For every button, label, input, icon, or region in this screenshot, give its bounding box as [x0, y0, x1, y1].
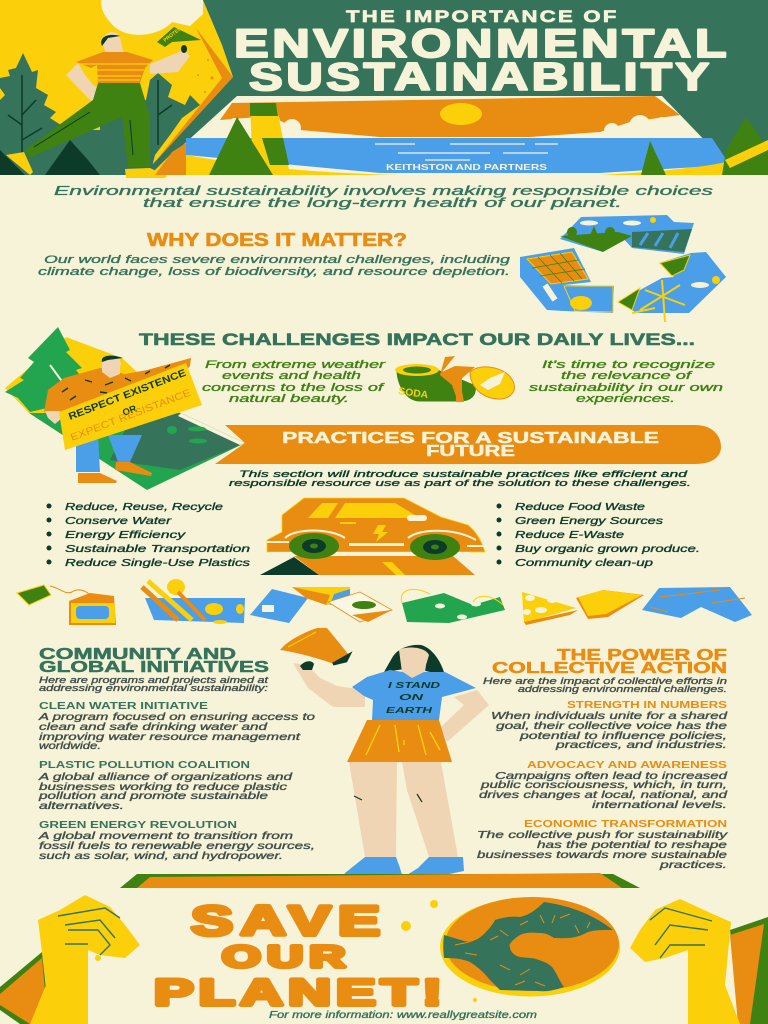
sign text: OR: [121, 403, 139, 419]
text block: daily impact right: It's time to recognize: [542, 359, 715, 371]
intro: addressing environmental challenges.: [518, 684, 727, 694]
heading: save our planet: [154, 898, 442, 1013]
intro text: that ensure the long-term health of our planet.: [143, 195, 622, 210]
item: strength in numbers: When individuals unite for a shared: [491, 711, 728, 722]
intro text: Environmental sustainability involves making responsible choices: [54, 183, 714, 198]
text block: daily impact left: events and health: [222, 370, 361, 382]
item: strength in numbers: potential to influence policies,: [518, 731, 727, 742]
list: practices left: [46, 501, 251, 569]
panel: power of collective action: [477, 647, 729, 871]
item: clean water: improving water resource management: [39, 732, 302, 743]
text block: daily impact right: experiences.: [576, 393, 675, 405]
item: plastic pollution: pollution and promote sustainable: [37, 791, 269, 802]
icon: cutlery and lunch box: [142, 579, 245, 624]
item: clean water: [38, 700, 316, 752]
item: plastic pollution: alternatives.: [39, 801, 124, 812]
title: THE IMPORTANCE OF: [346, 7, 616, 26]
text block: [38, 254, 511, 278]
icon row: eco products: [17, 579, 752, 625]
item: clean water: CLEAN WATER INITIATIVE: [39, 700, 208, 712]
illustration: protester with sign: [5, 327, 245, 490]
text block: daily impact right: the relevance of: [561, 370, 693, 382]
icon: food packaging: [250, 587, 392, 623]
panel: community and global initiatives: [37, 646, 316, 862]
item: green energy: GREEN ENERGY REVOLUTION: [39, 819, 237, 831]
heading: [492, 647, 727, 677]
icon: left hand: [30, 895, 140, 1024]
list: practices left: Reduce, Reuse, Recycle: [65, 501, 223, 513]
item: plastic pollution: A global alliance of organizations and: [37, 772, 293, 783]
list: practices right: Reduce E-Waste: [515, 529, 624, 541]
banner: practices heading: PRACTICES FOR A SUSTAINABLE: [282, 430, 659, 447]
text block: daily impact right: sustainability in our own: [529, 382, 723, 394]
heading: WHY DOES IT MATTER?: [147, 230, 407, 250]
heading: [39, 646, 269, 676]
icon: soda can and eggshell: [395, 356, 514, 402]
item: green energy: A global movement to transition from: [37, 831, 293, 842]
text block: daily impact left: From extreme weather: [205, 359, 387, 371]
intro: Here are programs and projects aimed at: [39, 675, 269, 685]
item: economic transformation: businesses towards more sustainable: [477, 850, 728, 861]
illustration: man with megaphone: PROTECT: [163, 24, 185, 44]
heading: THE POWER OF: [557, 647, 727, 664]
item: strength in numbers: STRENGTH IN NUMBERS: [567, 699, 727, 711]
item: clean water: A program focused on ensuring access to: [38, 712, 316, 723]
list: practices left: Sustainable Transportation: [65, 543, 250, 555]
item: economic transformation: [477, 818, 729, 871]
panel: header banner: [0, 0, 768, 178]
icon: right hand: [630, 899, 740, 1024]
text block: climate change, loss of biodiversity, and resource depletion.: [38, 266, 510, 278]
sign text: [67, 368, 193, 444]
icon: speech bubble: [101, 0, 203, 35]
list: practices right: Reduce Food Waste: [515, 501, 645, 513]
text block: practices intro: This section will introduce sustainable practices like efficient and: [239, 469, 688, 480]
text block: daily impact left: concerns to the loss of: [202, 382, 385, 394]
item: green energy: such as solar, wind, and hydropower.: [39, 851, 283, 862]
text block: daily impact left: natural beauty.: [229, 393, 349, 405]
banner: practices heading: [215, 425, 721, 464]
title: SUSTAINABILITY: [249, 55, 709, 99]
text block: daily impact right: [529, 359, 723, 405]
list: practices left: Energy Efficiency: [65, 529, 186, 541]
item: economic transformation: ECONOMIC TRANSFORMATION: [524, 818, 727, 830]
section: why does it matter: [38, 230, 511, 278]
item: plastic pollution: PLASTIC POLLUTION COALITION: [39, 759, 250, 771]
item: advocacy and awareness: Campaigns often lead to increased: [495, 771, 728, 782]
list: practices left: Reduce Single-Use Plastics: [65, 557, 251, 569]
banner: practices heading: FUTURE: [426, 443, 515, 460]
illustration: save our planet sign: [0, 873, 768, 1024]
icon: green tote bag: [401, 589, 505, 623]
intro: Here are the impact of collective efforts in: [483, 676, 727, 686]
item: clean water: worldwide.: [39, 741, 101, 752]
sign text: RESPECT EXISTENCE: [67, 368, 188, 423]
intro: [483, 676, 727, 694]
illustration: man with megaphone: [6, 24, 201, 178]
list: practices right: Community clean-up: [515, 557, 653, 569]
intro: addressing environmental sustainability:: [39, 683, 269, 693]
item: strength in numbers: goal, their collective voice has the: [496, 721, 728, 732]
item: green energy: [37, 819, 315, 862]
heading: save our planet: PLANET!: [154, 972, 442, 1013]
heading: COLLECTIVE ACTION: [492, 660, 727, 677]
intro: [39, 675, 269, 693]
footer: more information: For more information: www.reallygreatsite.com: [269, 1010, 537, 1021]
illustration: woman with megaphone: [280, 628, 489, 883]
text block: practices intro: responsible resource use as part of the solution to these challenges.: [229, 478, 691, 489]
illustration: electric car: [260, 498, 485, 575]
heading: COMMUNITY AND: [39, 646, 236, 663]
heading: save our planet: OUR: [222, 939, 345, 974]
icon: recycling arrows: [520, 215, 726, 322]
list: practices right: Buy organic grown produce.: [515, 543, 700, 555]
intro text: [54, 183, 714, 210]
icon: dotted cap and yellow shirt: [522, 590, 644, 625]
item: green energy: fossil fuels to renewable energy sources,: [39, 841, 315, 852]
item: clean water: clean and safe drinking water and: [39, 722, 268, 733]
shirt text: [386, 681, 440, 715]
icon: pine trees: [0, 53, 200, 175]
icon: blue shorts: [642, 587, 752, 622]
icon: earth globe: [440, 897, 620, 996]
text block: daily impact left: [202, 359, 387, 405]
heading: save our planet: SAVE: [191, 898, 380, 944]
illustration: lake landscape: [150, 96, 768, 175]
heading: GLOBAL INITIATIVES: [39, 659, 269, 676]
item: economic transformation: practices.: [658, 860, 727, 871]
item: strength in numbers: [491, 699, 728, 751]
list: practices right: Green Energy Sources: [515, 515, 664, 527]
item: plastic pollution: businesses working to reduce plastic: [39, 782, 287, 793]
shirt text: EARTH: [386, 706, 432, 715]
icon: orange megaphone: [280, 628, 349, 670]
sign text: EXPECT RESISTANCE: [69, 388, 193, 444]
text block: Our world faces severe environmental challenges, including: [44, 254, 511, 266]
caption: company name: KEITHSTON AND PARTNERS: [386, 162, 547, 172]
title: [234, 7, 727, 99]
icon: sun: [440, 103, 482, 125]
item: economic transformation: has the potential to reshape: [537, 840, 728, 851]
icon: tea bag: [17, 585, 116, 625]
item: economic transformation: The collective push for sustainability: [477, 830, 729, 841]
item: advocacy and awareness: ADVOCACY AND AWARENESS: [527, 759, 727, 771]
title: ENVIRONMENTAL: [234, 21, 727, 66]
list: practices right: [496, 501, 700, 569]
shirt text: I STAND: [388, 681, 440, 690]
item: strength in numbers: practices, and industries.: [554, 740, 727, 751]
icon: soda can and eggshell: SODA: [398, 386, 429, 401]
item: advocacy and awareness: [479, 759, 728, 811]
heading: daily lives: THESE CHALLENGES IMPACT OUR DAILY LIVES...: [139, 330, 695, 349]
item: plastic pollution: [37, 759, 293, 812]
shirt text: ON: [399, 693, 423, 702]
item: advocacy and awareness: international levels.: [592, 800, 727, 811]
list: practices left: Conserve Water: [65, 515, 172, 527]
item: advocacy and awareness: drives changes at local, national, and: [479, 790, 728, 801]
item: advocacy and awareness: public consciousness, which, in turn,: [479, 780, 727, 791]
text block: practices intro: [229, 469, 691, 489]
